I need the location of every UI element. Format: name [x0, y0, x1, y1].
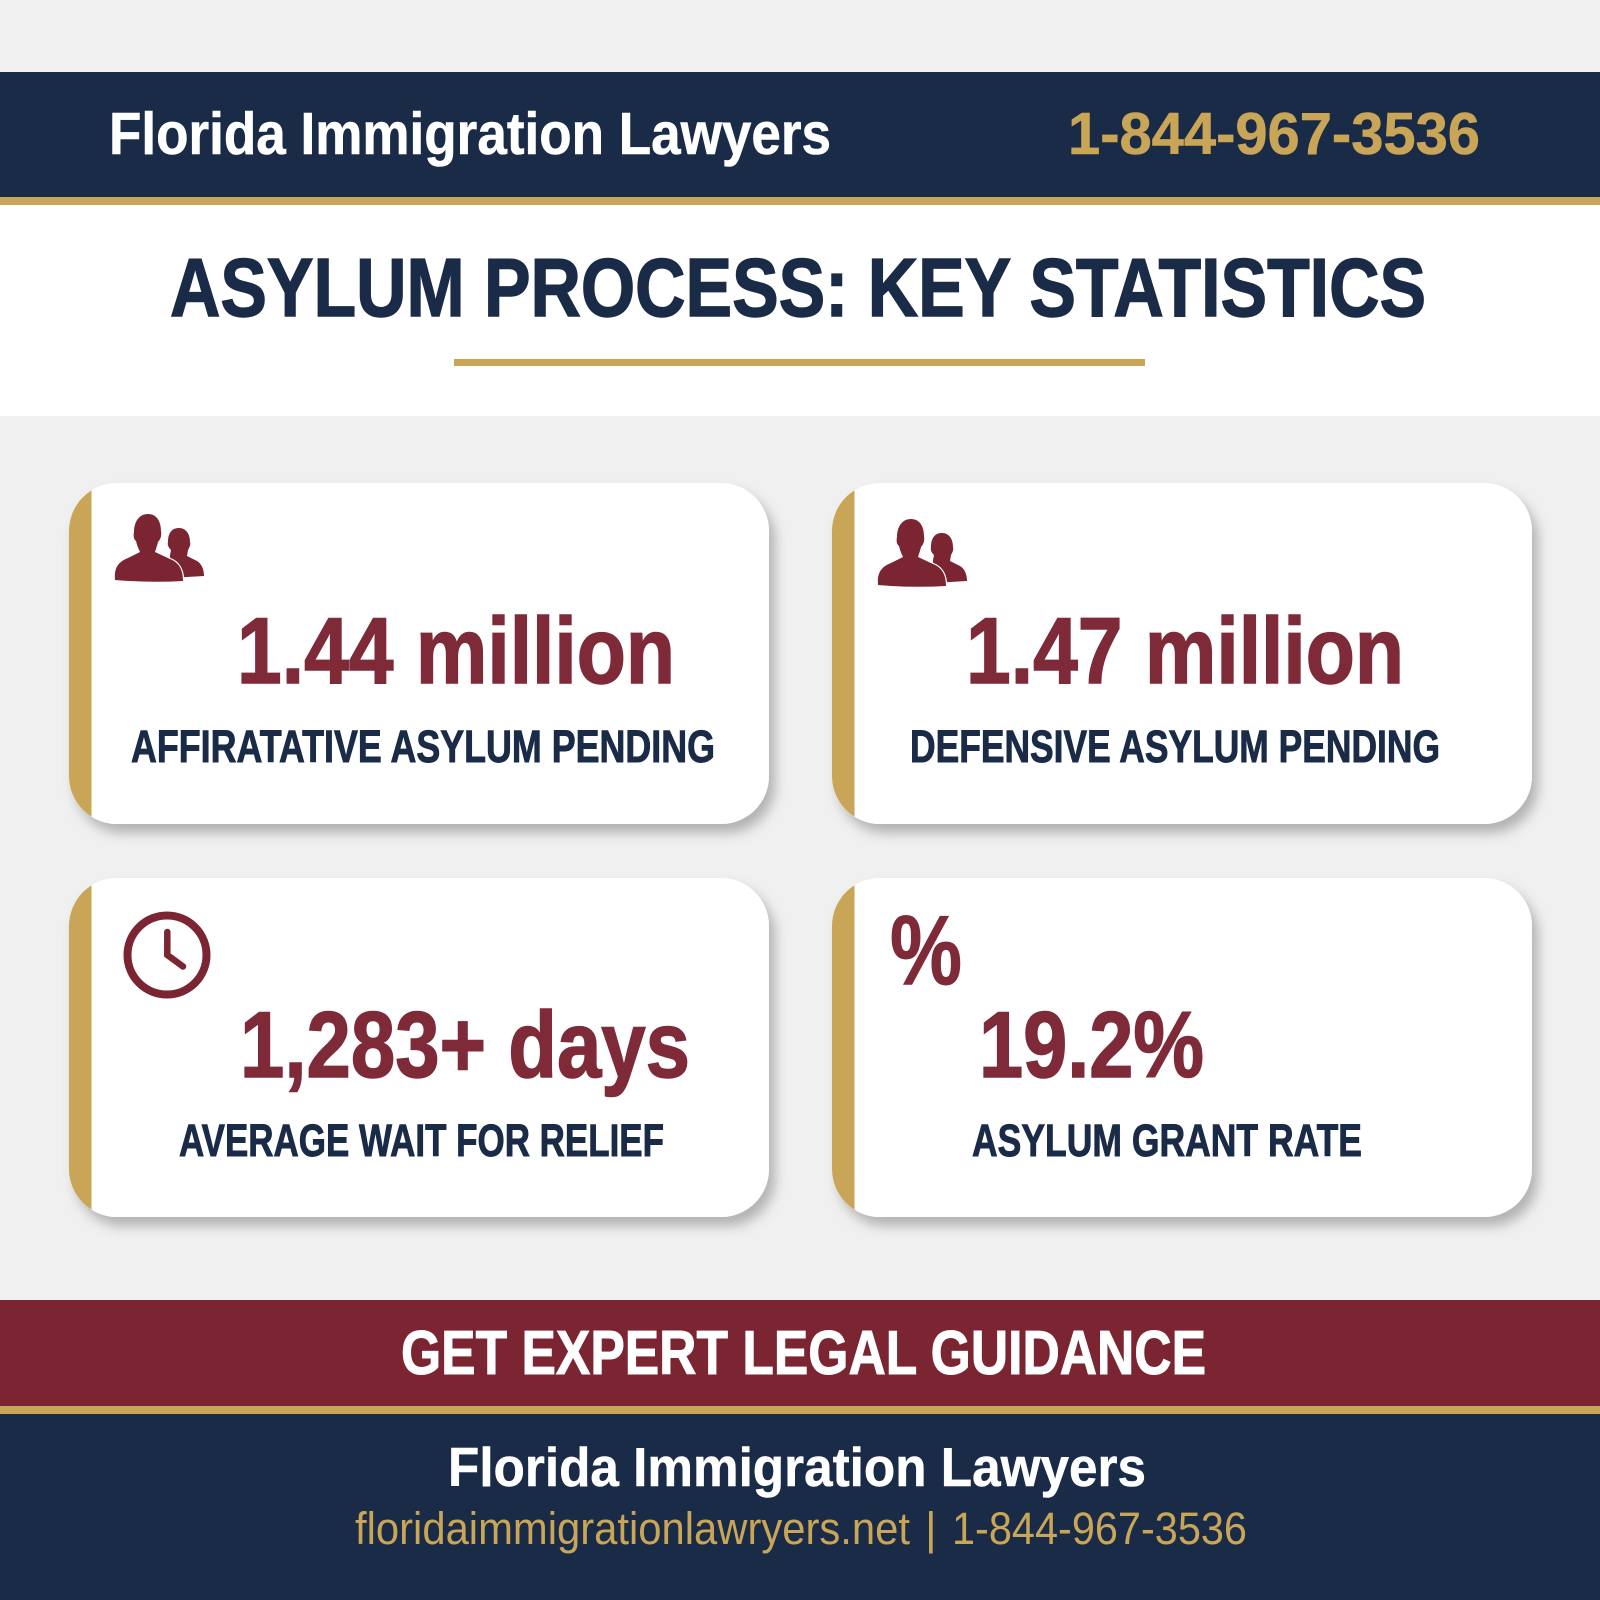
- footer contact line: floridaimmigrationlawryers.net: [355, 1503, 910, 1554]
- panel: defensive asylum pending: [832, 483, 1532, 824]
- call to action band: [0, 1300, 1600, 1414]
- stat value: 1,283+ days: [240, 992, 690, 1097]
- footer contact line: [355, 1503, 1247, 1554]
- icon: people: [878, 519, 967, 587]
- stat label: AVERAGE WAIT FOR RELIEF: [179, 1115, 664, 1166]
- footer contact line: |: [925, 1503, 937, 1554]
- stat label: AFFIRATATIVE ASYLUM PENDING: [131, 721, 715, 772]
- call to action text: GET EXPERT LEGAL GUIDANCE: [401, 1319, 1206, 1388]
- title section: [0, 205, 1600, 416]
- footer band: [0, 1414, 1600, 1600]
- header firm name: Florida Immigration Lawyers: [109, 101, 831, 167]
- stat value: 19.2%: [979, 992, 1204, 1097]
- icon: people: [115, 514, 204, 582]
- stat value: 1.47 million: [966, 598, 1404, 703]
- stat value: 1.44 million: [237, 598, 675, 703]
- icon: clock: [128, 916, 206, 994]
- footer contact line: 1-844-967-3536: [952, 1503, 1247, 1554]
- header band: [0, 72, 1600, 205]
- header phone number: 1-844-967-3536: [1068, 101, 1480, 167]
- panel: affirmative asylum pending: [69, 483, 769, 824]
- panel: asylum grant rate: [832, 878, 1532, 1217]
- footer firm name: Florida Immigration Lawyers: [448, 1436, 1146, 1498]
- icon: percent: %: [890, 895, 962, 1005]
- stat label: DEFENSIVE ASYLUM PENDING: [910, 721, 1440, 772]
- stat label: ASYLUM GRANT RATE: [972, 1115, 1362, 1166]
- panel: average wait for relief: [69, 878, 769, 1217]
- title underline: [454, 359, 1145, 366]
